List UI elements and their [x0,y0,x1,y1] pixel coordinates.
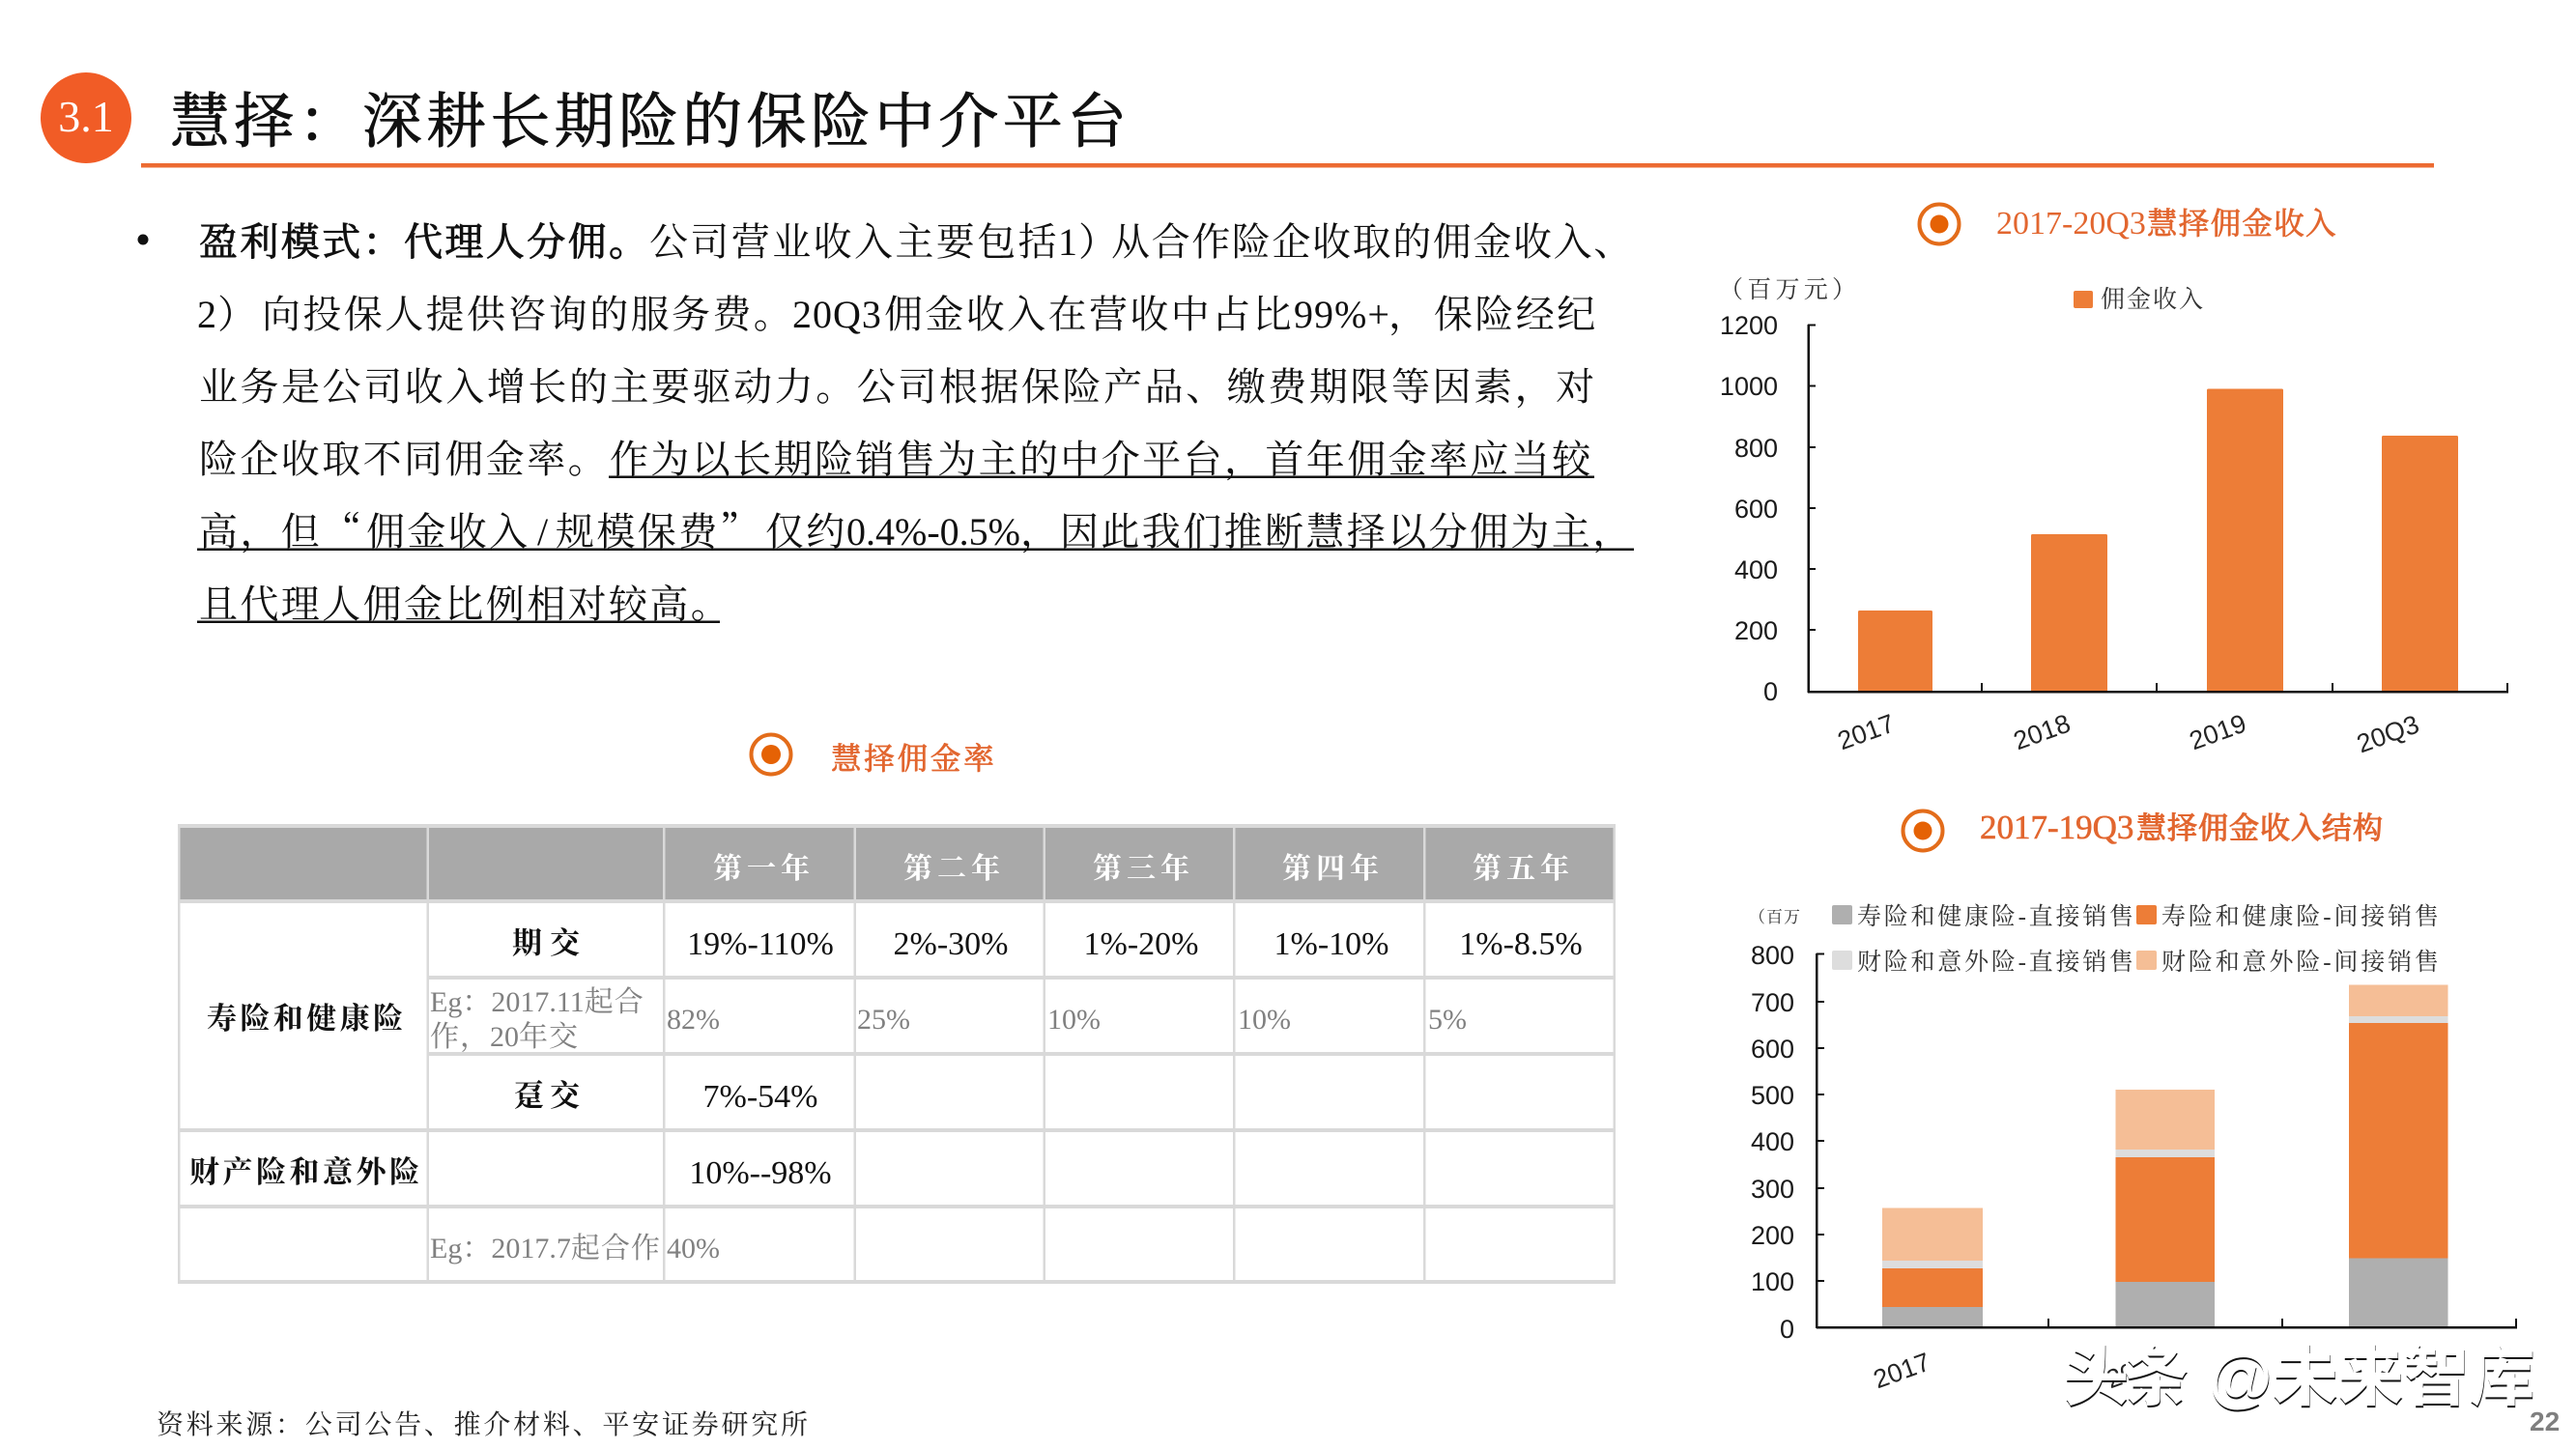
bullet text block: 从合作险企收取的佣金收入、 [1111,220,1634,264]
icon: target [1903,811,1942,850]
row: property and accident [189,1155,832,1264]
bullet text block: / [537,510,549,554]
legend: 财险和意外险-直接销售 [1857,949,2133,976]
row: life and health: 10% [1047,1004,1101,1036]
y axis: 400 [1734,555,1778,584]
y axis: 0 [1780,1315,1794,1344]
chart heading: income structure: 2017-19Q3 [1980,809,2133,846]
row: life and health: 1%-8.5% [1459,926,1583,962]
y axis: 400 [1751,1127,1794,1156]
bullet text block: 盈利模式：代理人分佣。 [199,220,649,264]
chart heading: income structure: 慧择佣金收入结构 [2136,811,2384,845]
row: property and accident: 财产险和意外险 [189,1155,419,1189]
y axis: 600 [1751,1035,1794,1064]
x axis: 2018 [2103,1348,2167,1394]
bullet text block: ” [720,501,760,556]
row: life and health: 10% [1238,1004,1291,1036]
bullet text block: 业务是公司收入增长的主要驱动力。公司根据保险产品、缴费期限等因素，对 [199,365,1597,409]
bullet text block [137,220,1634,626]
bar chart: commission income [1719,276,2508,758]
chart heading: commission income: 2017-20Q3 [1996,206,2146,242]
row: property and accident: 40% [667,1233,720,1264]
title: 慧择：深耕长期险的保险中介平台 [170,90,1127,156]
y axis: 700 [1751,988,1794,1017]
row: life and health: 2%-30% [894,926,1008,962]
y axis: 800 [1734,434,1778,463]
bullet text block: 99%+ [1294,293,1390,336]
bullet text block: 1 [1058,220,1078,264]
x axis: 2018 [2010,709,2075,755]
y axis: 1000 [1720,372,1778,401]
bar chart: commission income: （百万元） [1719,276,1856,303]
bullet text block: 规模保费 [556,510,720,554]
legend: 寿险和健康险-直接销售 [1857,903,2133,930]
bullet text block: 险企收取不同佣金率。 [199,438,609,481]
x axis: 2019 [2186,709,2250,755]
row: life and health: 5% [1428,1004,1467,1036]
row: property and accident: Eg：2017.7起合作 [430,1233,661,1264]
icon: target [752,734,790,775]
row: life and health: 82% [667,1004,720,1036]
section number badge [41,72,131,163]
title rule [141,163,2434,168]
chart heading: commission income: 慧择佣金收入 [2147,207,2337,241]
chart heading: commission income [1919,205,2337,243]
table heading: 慧择佣金率 [831,742,995,776]
table header row: 第四年 [1282,853,1379,885]
row: life and health: 1%-10% [1274,926,1388,962]
y axis: 200 [1734,616,1778,645]
source note: 资料来源：公司公告、推介材料、平安证券研究所 [157,1409,808,1440]
row: property and accident: 10%--98% [689,1155,832,1191]
bullet text block: 向投保人提供咨询的服务费。 [262,293,794,336]
icon: target [1919,205,1960,243]
legend: 佣金收入 [2101,286,2203,313]
y axis: 0 [1763,677,1778,706]
row: life and health [207,926,1583,1115]
y axis: 1200 [1720,311,1778,340]
row: life and health: 寿险和健康险 [207,1002,403,1036]
bullet text block: 佣金收入 [366,510,530,554]
bullet text block: ， [1020,510,1061,554]
bullet text block: 0.4%-0.5% [846,510,1020,554]
y axis: 600 [1734,495,1778,524]
y axis: 200 [1751,1221,1794,1250]
bullet text block: ） [217,293,258,336]
row: life and health: Eg：2017.11起合 [430,986,644,1018]
watermark: @未来智库 [2209,1343,2535,1416]
bullet text block: “ [323,501,363,556]
bar: 2019 [2349,985,2448,1327]
chart heading: income structure [1903,809,2384,850]
bullet text block: 且代理人佣金比例相对较高。 [199,582,731,626]
x axis: 2019 [2335,1348,2400,1394]
table header row [713,853,1569,885]
bullet text block: 佣金收入在营收中占比 [884,293,1294,336]
table heading [752,734,995,776]
row: life and health: 7%-54% [703,1079,817,1115]
commission rate table [178,824,1616,1284]
bars [1858,388,2458,692]
section number badge: 3.1 [58,92,114,141]
stacked bar chart: income structure: （百万 [1749,908,1800,926]
bar: 2017 [1882,1208,1983,1327]
table header row: 第二年 [903,853,1000,885]
stacked bar chart: income structure [1749,903,2517,1394]
row: life and health: 25% [857,1004,910,1036]
watermark: 头条 [2064,1343,2190,1416]
bullet text block: 因此我们推断慧择以分佣为主， [1060,510,1634,554]
y axis [1720,311,1816,706]
x axis [1808,683,2508,758]
row: life and health: 期交 [512,926,581,960]
x axis [1817,1319,2517,1394]
table header row: 第五年 [1473,853,1569,885]
bullet text block: ， [1388,293,1429,336]
bullet text block: 高，但 [199,510,322,554]
bar: 2018 [2116,1090,2215,1327]
y axis [1751,941,1824,1344]
table header row: 第一年 [713,853,810,885]
y axis: 300 [1751,1175,1794,1204]
bullet text block: 仅约 [765,510,847,554]
legend: 财险和意外险-间接销售 [2161,949,2439,976]
y axis: 800 [1751,941,1794,970]
legend: 寿险和健康险-间接销售 [2161,903,2439,930]
bullet text block: 2 [197,293,217,336]
bullet text block: 作为以长期险销售为主的中介平台，首年佣金率应当较 [610,438,1593,481]
row: life and health: 作，20年交 [430,1021,579,1053]
table header row: 第三年 [1093,853,1189,885]
row: life and health: 19%-110% [687,926,834,962]
y axis: 100 [1751,1267,1794,1296]
page number: 22 [2530,1406,2560,1436]
row: life and health: 1%-20% [1084,926,1198,962]
x axis: 20Q3 [2353,710,2423,758]
bullet text block: 公司营业收入主要包括 [649,220,1059,264]
legend [1832,903,2439,976]
x axis: 2017 [1834,709,1899,755]
watermark [2058,1341,2539,1416]
row: life and health: 趸交 [514,1079,581,1113]
x axis: 2017 [1870,1348,1934,1394]
y axis: 500 [1751,1081,1794,1110]
bullet text block: 20Q3 [792,293,882,336]
bullet text block: ） [1078,220,1119,264]
bullet text block: 保险经纪 [1434,293,1598,336]
